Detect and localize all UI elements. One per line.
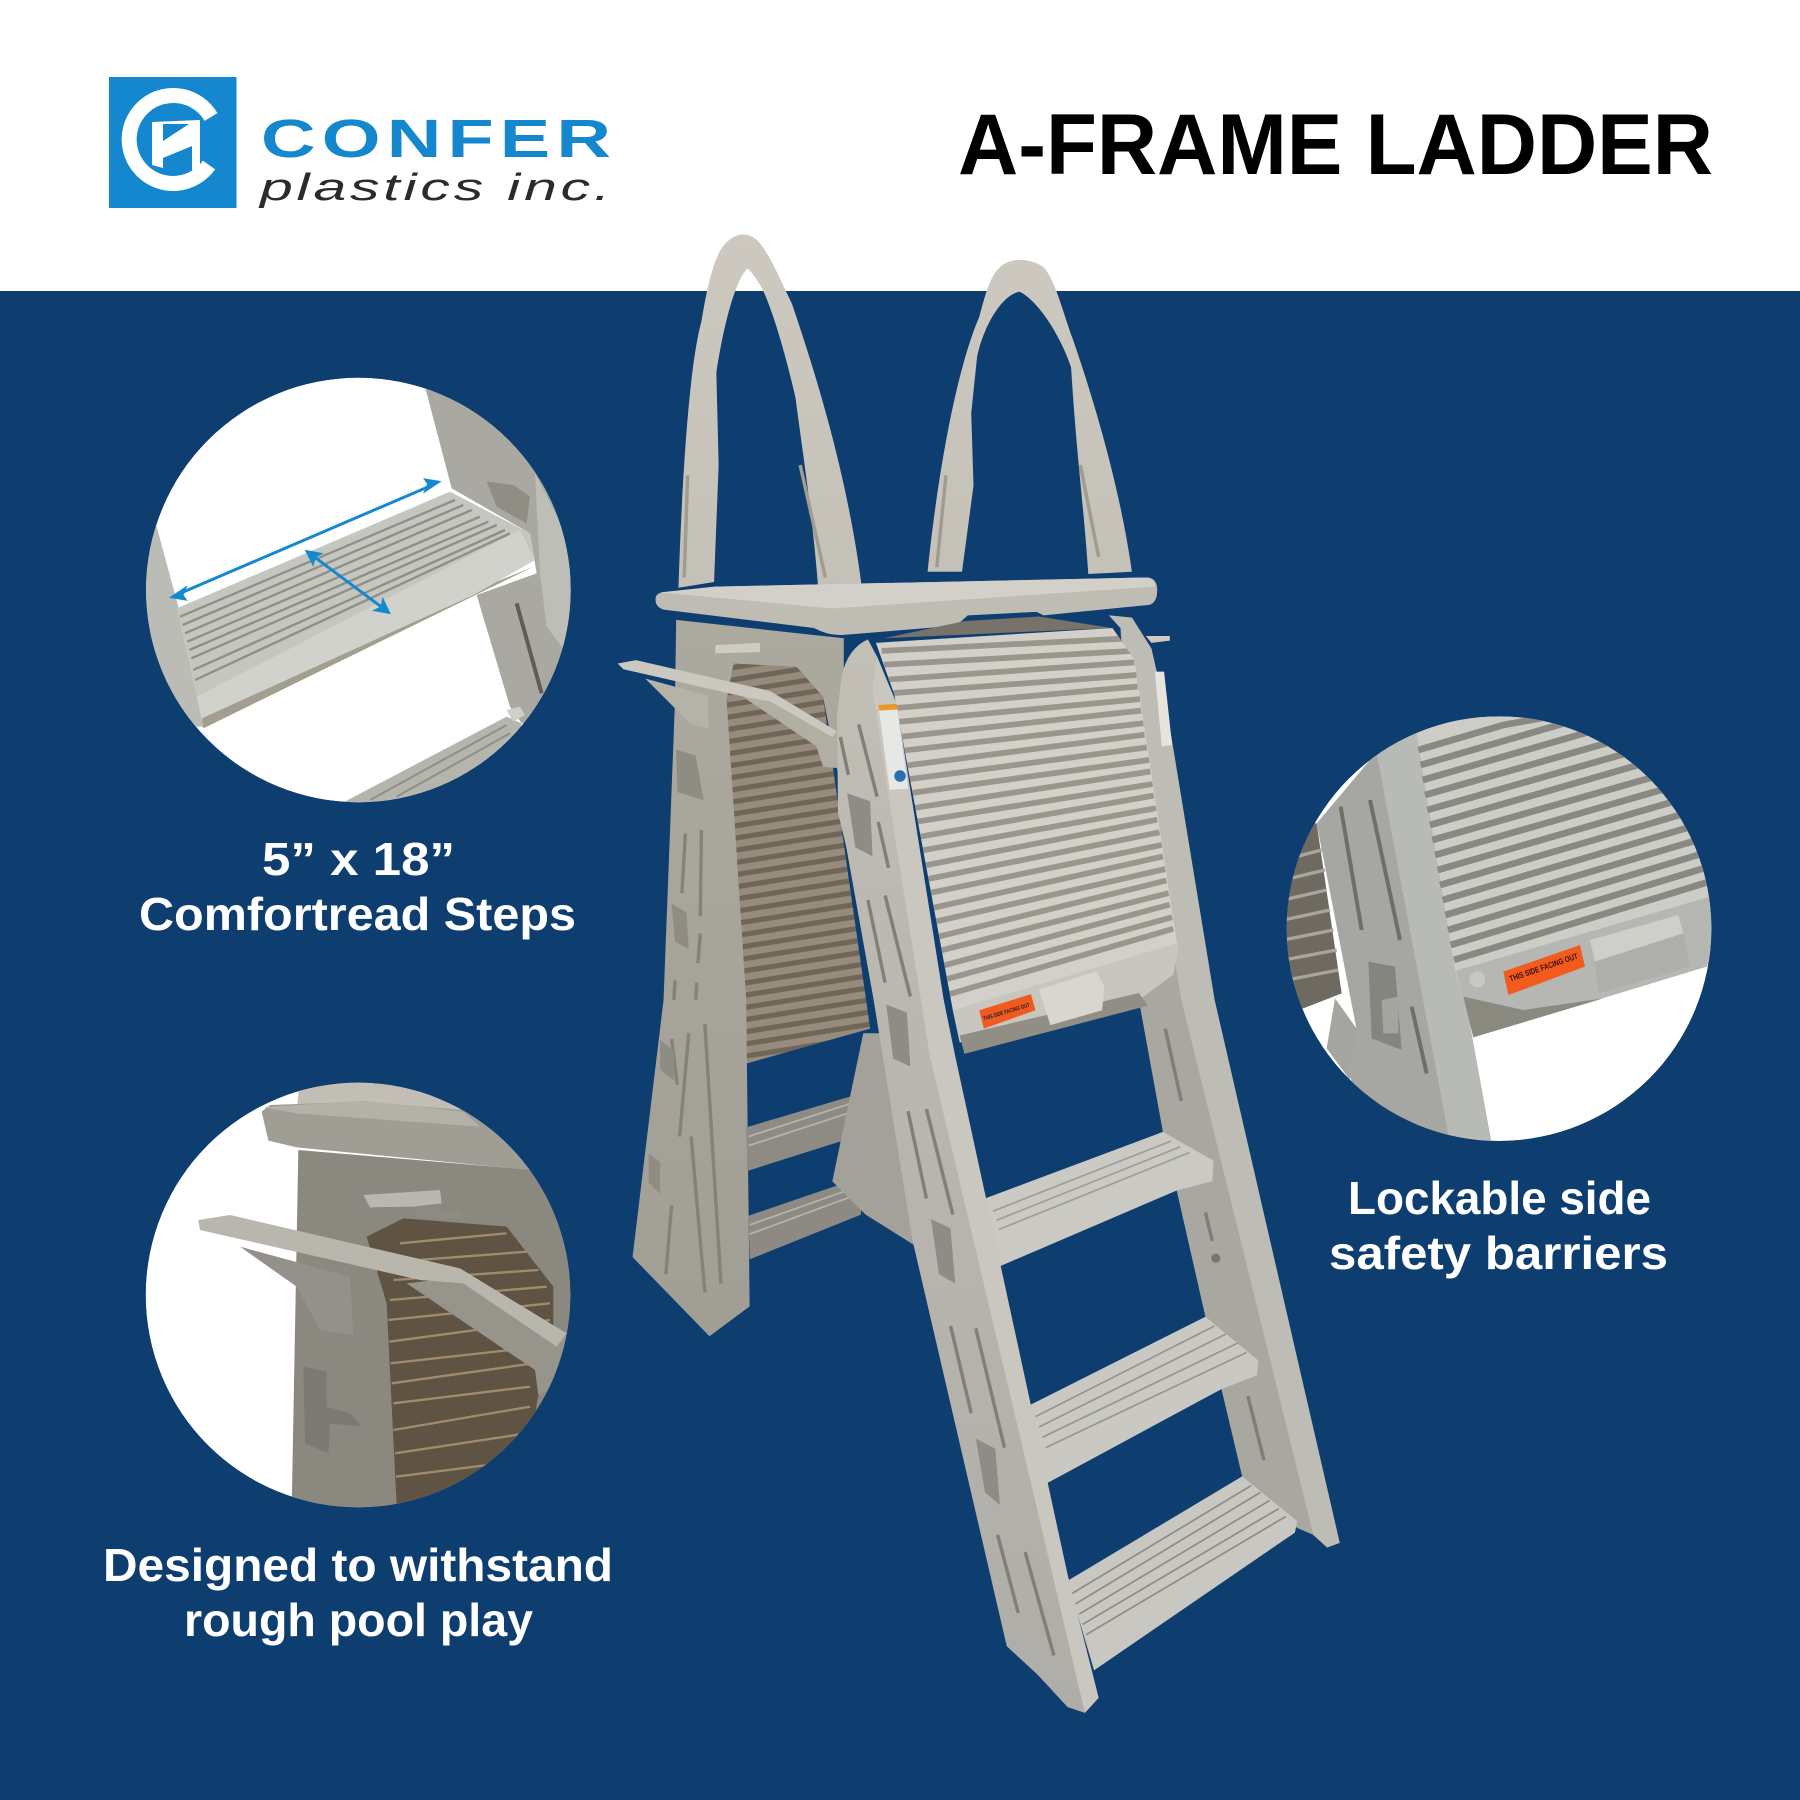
arm top rail xyxy=(618,660,837,737)
icon: logo C ring xyxy=(129,95,211,183)
caption line 2: Comfortread Steps xyxy=(139,888,576,940)
upper rear step ridges xyxy=(748,1102,861,1146)
lower tread grooves xyxy=(370,725,510,800)
orange label text: THIS SIDE FACING OUT xyxy=(1508,951,1579,984)
post latch xyxy=(303,1367,362,1453)
bolt xyxy=(1469,971,1485,987)
panel stripes xyxy=(1418,718,1707,963)
right side nub xyxy=(1146,636,1170,643)
left handrail xyxy=(678,234,863,599)
caption: safety barriers: Lockable side xyxy=(1348,1172,1651,1224)
brace xyxy=(1327,998,1360,1080)
logo wordmark: CONFER xyxy=(261,109,611,169)
rear leg brackets xyxy=(649,750,704,1194)
right handrail xyxy=(928,260,1132,574)
left stile xyxy=(146,526,203,727)
plate shadow xyxy=(1463,997,1603,1037)
stile rail highlight xyxy=(872,657,1099,1713)
step 3 xyxy=(1068,1476,1297,1670)
caption line 2: rough pool play xyxy=(184,1594,533,1646)
left safety sticker xyxy=(878,704,908,790)
small handle xyxy=(363,1190,442,1207)
tread front edge xyxy=(197,530,535,718)
right stile xyxy=(1109,615,1340,1548)
bottom plate xyxy=(1456,897,1712,1035)
platform top xyxy=(660,577,1155,608)
step 3 grooves xyxy=(1072,1486,1286,1635)
arm support xyxy=(240,1247,353,1335)
right safety sticker xyxy=(1155,672,1172,746)
orange label xyxy=(979,994,1035,1029)
orange label text: THIS SIDE FACING OUT xyxy=(983,1003,1031,1022)
step 2 xyxy=(1030,1317,1258,1483)
upper rear step xyxy=(746,1096,872,1171)
caption line 2: safety barriers xyxy=(1329,1227,1668,1279)
latch recess xyxy=(1368,962,1402,1050)
front left stile xyxy=(837,639,1099,1713)
platform xyxy=(656,577,1157,635)
lower tread xyxy=(343,717,522,803)
caption: safety barriers xyxy=(1329,1172,1668,1279)
right stile hole xyxy=(1211,1254,1220,1263)
stile xyxy=(1317,713,1490,1143)
bracket xyxy=(413,1207,463,1220)
far ribs xyxy=(1283,823,1342,1008)
product illustration: A-frame ladder xyxy=(618,234,1340,1713)
body xyxy=(292,1150,573,1510)
handle xyxy=(1590,915,1683,962)
front stile slots xyxy=(840,724,1054,1655)
rear steps xyxy=(746,1096,872,1259)
arm support xyxy=(645,678,708,728)
orange label xyxy=(1503,945,1585,995)
icon: logo blue square xyxy=(109,77,236,208)
caption: steps: 5” x 18” xyxy=(262,833,455,885)
rear leg and header xyxy=(633,620,844,1336)
panel xyxy=(1416,716,1712,1030)
caption: pool play: Designed to withstand xyxy=(103,1539,613,1591)
callout image: step detail xyxy=(130,378,597,803)
rear leg slots xyxy=(666,830,721,1293)
front stile brackets xyxy=(847,793,1000,1505)
tread underside xyxy=(202,567,533,728)
right stile slots xyxy=(1165,1029,1264,1460)
panel shadow under platform xyxy=(884,616,1111,638)
arrow: depth dimension xyxy=(305,550,391,614)
tread grooves xyxy=(180,500,510,680)
caption: steps xyxy=(139,833,576,940)
panel bottom plate xyxy=(953,944,1178,1042)
white header background xyxy=(0,0,1800,292)
icon: logo monogram xyxy=(152,120,200,170)
roller safety panel xyxy=(876,628,1178,1042)
step 2 grooves xyxy=(1035,1326,1247,1448)
barrier ribs xyxy=(388,1233,550,1477)
swing-out arm xyxy=(618,660,837,768)
arm lower brace xyxy=(743,696,837,768)
panel handle xyxy=(1039,971,1104,1025)
callout image: swing arm detail xyxy=(146,1080,573,1510)
A brace xyxy=(832,1033,924,1251)
step 1 xyxy=(985,1132,1213,1266)
sticker warning band xyxy=(878,704,898,711)
peg xyxy=(507,707,525,722)
small top handle xyxy=(715,643,760,653)
left rail slots xyxy=(684,465,825,577)
tread xyxy=(177,492,535,718)
front steps xyxy=(985,1132,1297,1670)
right arm xyxy=(407,1277,567,1395)
logo: Confer Plastics xyxy=(109,77,611,208)
handle shadow xyxy=(1595,933,1690,993)
stile rail xyxy=(1377,713,1492,1143)
panel stripes xyxy=(882,638,1173,994)
title: A-FRAME LADDER xyxy=(958,97,1713,193)
hand rail xyxy=(198,1215,567,1347)
callout image: barrier detail xyxy=(1286,716,1712,1141)
lower rear step ridges xyxy=(750,1192,850,1234)
platform rim xyxy=(656,577,1157,635)
lower rear step xyxy=(748,1185,861,1259)
rear barrier xyxy=(727,664,870,1064)
right stile rail xyxy=(1109,615,1340,1548)
top rail stub xyxy=(297,1080,530,1170)
far rib highlights xyxy=(1283,850,1338,980)
platform highlight xyxy=(263,1101,480,1127)
platform edge xyxy=(262,1102,530,1170)
stile highlight xyxy=(535,474,571,648)
latch xyxy=(1382,997,1398,1033)
caption: pool play xyxy=(103,1539,613,1646)
plate shadow xyxy=(960,993,1148,1054)
slot xyxy=(517,603,542,693)
dark barrier xyxy=(367,1218,553,1510)
stile slots xyxy=(1341,800,1427,1073)
latch xyxy=(487,482,530,523)
right stile xyxy=(426,388,571,724)
arrow: width dimension xyxy=(169,478,441,601)
logo subline: plastics inc. xyxy=(258,165,610,208)
right rail slots xyxy=(937,465,1099,567)
step 1 grooves xyxy=(993,1141,1189,1230)
sticker blue badge xyxy=(894,770,906,782)
